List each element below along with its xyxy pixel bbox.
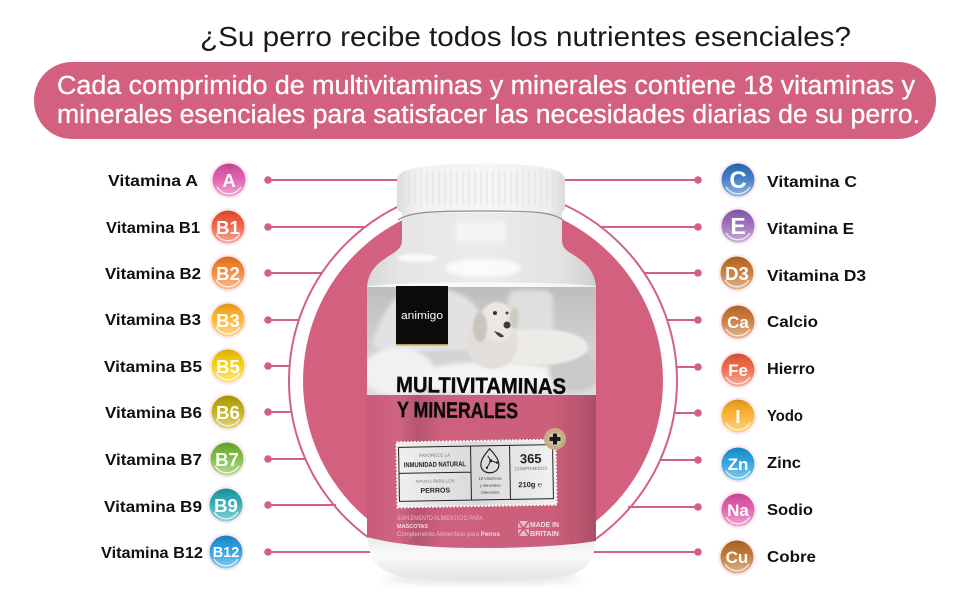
info card: APOYO PARA LOS — [416, 478, 455, 484]
left vitamin labels: Vitamina A — [108, 173, 198, 190]
info card: 18 Vitaminas — [479, 476, 502, 481]
left vitamin badges: B6 — [216, 402, 240, 423]
right vitamin badges: Fe — [728, 361, 748, 380]
right vitamin labels: Zinc — [767, 455, 801, 472]
left vitamin labels: Vitamina B2 — [105, 266, 201, 283]
left vitamin badges: B12 — [213, 545, 239, 561]
left vitamin labels: Vitamina B1 — [106, 220, 200, 237]
label pink — [367, 393, 596, 548]
info card: FAVORECE LA — [419, 452, 450, 458]
made in britain: MADE IN — [530, 520, 559, 529]
right vitamin labels: Cobre — [767, 549, 816, 566]
right vitamin badges — [718, 161, 757, 576]
left vitamin badges: B5 — [216, 356, 240, 377]
left vitamin labels: Vitamina B12 — [101, 545, 203, 562]
logo box: animigo — [401, 310, 443, 322]
seal — [544, 428, 566, 450]
label photo — [362, 287, 601, 396]
logo box — [396, 286, 448, 346]
bottle base — [367, 530, 596, 580]
right vitamin labels: Calcio — [767, 314, 818, 331]
right vitamin labels: Vitamina E — [767, 221, 854, 238]
left vitamin labels: Vitamina B9 — [104, 499, 202, 516]
info card: COMPRIMIDOS — [515, 466, 547, 471]
left vitamin labels: Vitamina B7 — [105, 452, 202, 469]
banner: Cada comprimido de multivitaminas y minerales contiene 18 vitaminas y — [57, 72, 915, 100]
info card: 210g ℮ — [518, 480, 542, 489]
banner — [34, 62, 936, 139]
right vitamin labels — [767, 174, 866, 566]
bottle shoulder and neck — [367, 206, 596, 290]
right vitamin labels: Yodo — [767, 408, 803, 425]
right vitamin badges: Na — [727, 501, 749, 520]
info card: 365 — [520, 451, 542, 466]
info card: y Minerales — [480, 483, 500, 488]
small label text: MASCOTAS — [397, 524, 428, 530]
pillows — [362, 290, 601, 396]
left vitamin badges: B2 — [216, 263, 240, 284]
product bottle — [362, 164, 601, 582]
left vitamin badges: B7 — [215, 449, 239, 470]
small label text — [397, 515, 500, 538]
info card — [396, 440, 557, 507]
small label text: Complemento Alimenticio para Perros — [397, 531, 500, 538]
banner: minerales esenciales para satisfacer las necesidades diarias de su perro. — [57, 101, 920, 129]
right vitamin badges: Ca — [727, 313, 749, 332]
background circle — [289, 187, 677, 575]
right vitamin badges: C — [729, 167, 747, 194]
connector lines right — [565, 176, 702, 556]
left vitamin labels: Vitamina B5 — [104, 359, 202, 376]
right vitamin badges: Zn — [728, 455, 748, 474]
product name — [396, 372, 566, 423]
right vitamin labels: Vitamina D3 — [767, 268, 866, 285]
product name: MULTIVITAMINAS — [396, 372, 566, 399]
info card: INMUNIDAD NATURAL — [404, 461, 467, 469]
left vitamin badges: B9 — [214, 495, 238, 516]
info card: PERROS — [420, 487, 450, 495]
left vitamin badges — [207, 161, 248, 571]
right vitamin badges: I — [735, 406, 741, 427]
right vitamin labels: Hierro — [767, 361, 815, 378]
left vitamin labels: Vitamina B3 — [105, 312, 201, 329]
right vitamin badges: D3 — [725, 263, 749, 284]
left vitamin badges: A — [222, 170, 236, 191]
left vitamin badges: B3 — [216, 310, 240, 331]
made in britain — [518, 520, 559, 538]
left vitamin labels — [101, 173, 203, 562]
small label text: SUPLEMENTO ALIMENTICIO PARA — [397, 515, 484, 522]
title: ¿Su perro recibe todos los nutrientes esenciales? — [200, 21, 851, 52]
left vitamin labels: Vitamina B6 — [105, 405, 202, 422]
dog — [466, 302, 588, 369]
cap — [397, 164, 565, 220]
info card: Diferentes — [481, 490, 499, 495]
made in britain: BRITAIN — [530, 529, 559, 538]
right vitamin labels: Vitamina C — [767, 174, 857, 191]
right vitamin badges: E — [730, 213, 746, 239]
right vitamin labels: Sodio — [767, 502, 813, 519]
shoulder highlights — [367, 222, 596, 290]
connector lines left — [264, 176, 398, 556]
right vitamin badges: Cu — [726, 548, 748, 567]
left vitamin badges: B1 — [216, 217, 240, 238]
icon: drop — [481, 449, 499, 473]
product name: Y MINERALES — [397, 397, 518, 423]
